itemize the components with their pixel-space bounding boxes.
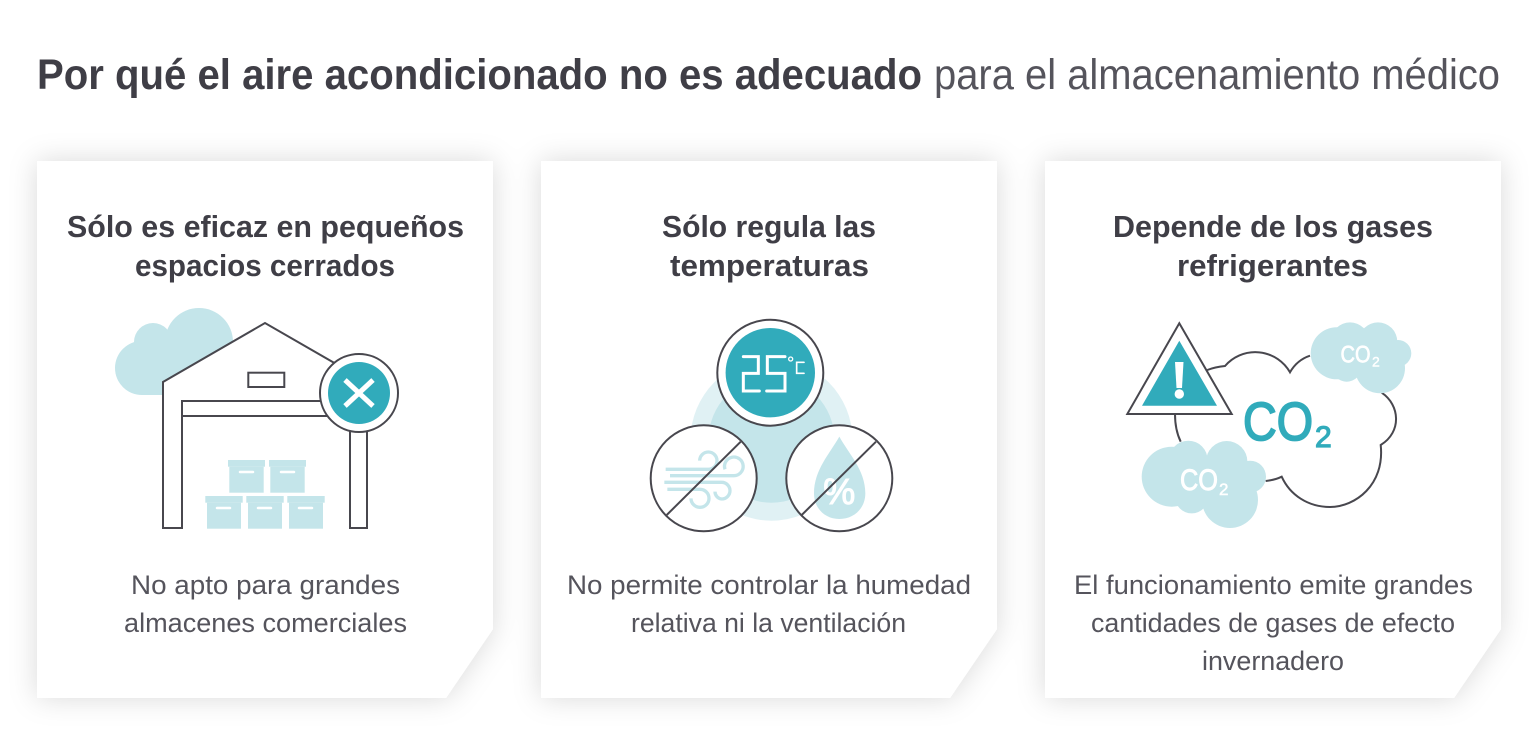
bottom left cloud: 2 (1219, 480, 1228, 499)
backdrop rings (690, 359, 852, 521)
heading: Sólo es eficaz en pequeños (67, 210, 464, 244)
panel: small spaces (37, 161, 493, 698)
icon: warehouse with boxes (115, 308, 398, 529)
heading: espacios cerrados (135, 249, 395, 283)
main cloud outline (1175, 352, 1396, 507)
cross badge (320, 354, 398, 432)
body text: No permite controlar la humedad (567, 570, 971, 600)
top right cloud: 2 (1372, 354, 1380, 370)
body text: relativa ni la ventilación (631, 608, 906, 638)
heading: temperaturas (670, 249, 869, 283)
title (37, 51, 1500, 99)
boxes (205, 460, 325, 529)
warehouse outline (163, 323, 367, 528)
main CO2 label: 2 (1315, 421, 1332, 454)
body text (567, 570, 971, 638)
heading (662, 210, 876, 283)
heading: Sólo regula las (662, 210, 876, 244)
card background (1045, 161, 1501, 698)
no wind (651, 425, 757, 531)
cloud (115, 308, 233, 395)
body text: almacenes comerciales (124, 608, 407, 638)
heading (1113, 210, 1433, 283)
bottom left cloud (1142, 441, 1266, 528)
icon: temperature, wind, humidity (651, 320, 892, 531)
title: Por qué el aire acondicionado no es adecuado (37, 51, 922, 99)
temperature display (717, 320, 823, 426)
warning triangle (1127, 323, 1232, 414)
top right cloud: CO (1340, 342, 1370, 369)
bottom left cloud: CO (1180, 464, 1218, 497)
body text: No apto para grandes (131, 570, 400, 600)
no humidity: % (823, 471, 855, 512)
body text: El funcionamiento emite grandes (1074, 570, 1473, 600)
main CO2 label: CO (1243, 392, 1313, 452)
heading: Depende de los gases (1113, 210, 1433, 244)
body text: invernadero (1202, 646, 1344, 676)
heading (67, 210, 464, 283)
heading: refrigerantes (1177, 249, 1368, 283)
top right cloud (1311, 322, 1411, 393)
body text (124, 570, 407, 638)
card background (37, 161, 493, 698)
icon: CO2 clouds and warning (1127, 322, 1411, 528)
no humidity (786, 425, 892, 531)
title: para el almacenamiento médico (934, 51, 1500, 99)
card shadows (37, 161, 1501, 698)
card background (541, 161, 997, 698)
body text: cantidades de gases de efecto (1091, 608, 1455, 638)
panel: refrigerant gases (1045, 161, 1501, 698)
panel: temperature only (541, 161, 997, 698)
body text (1074, 570, 1473, 676)
